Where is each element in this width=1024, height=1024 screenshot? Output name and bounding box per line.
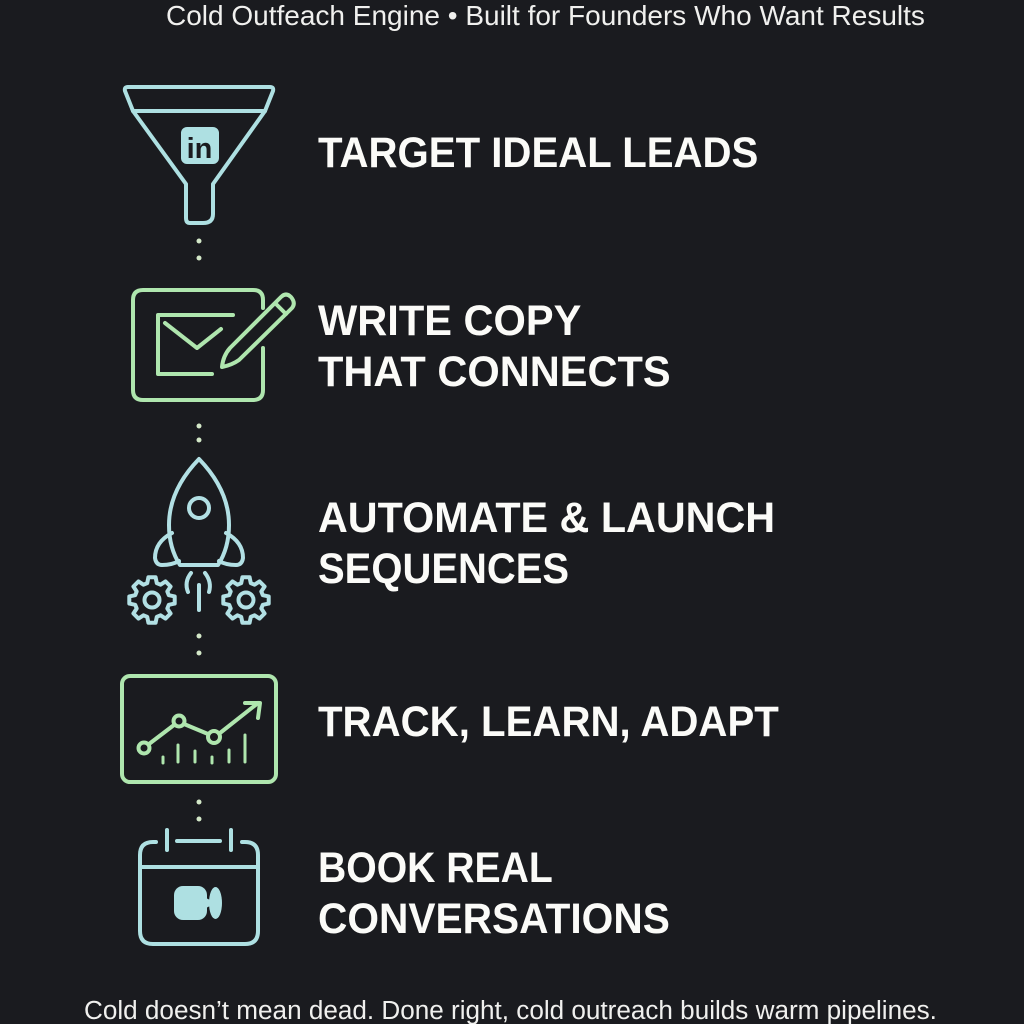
heading: write copy [318,297,670,396]
title: Cold Outfeach Engine • Built for Founders Who Want Results [166,0,925,31]
connector dots 2 [196,424,202,442]
gear left [129,577,175,623]
heading: write copy: THAT CONNECTS [318,348,670,396]
icon: calendar with video [140,830,258,944]
heading: write copy: WRITE COPY [318,297,581,345]
heading: book real conversations [318,844,669,943]
icon: funnel with linkedin [125,87,273,223]
heading: automate and launch: SEQUENCES [318,545,569,593]
icon: growth chart [122,676,276,782]
icon: rocket and gears [129,459,269,623]
heading: track learn adapt: TRACK, LEARN, ADAPT [318,698,778,746]
icon: funnel with linkedin: in [187,133,212,165]
icon: email and pencil [133,290,294,400]
heading: book real conversations: BOOK REAL [318,844,552,892]
connector dots 4 [196,800,202,822]
connector dots 3 [196,634,202,656]
heading: automate and launch: AUTOMATE & LAUNCH [318,494,775,542]
connector dots 1 [196,238,202,260]
gear right [223,577,269,623]
heading: book real conversations: CONVERSATIONS [318,895,669,943]
heading: target ideal leads: TARGET IDEAL LEADS [318,129,758,177]
heading: automate and launch [318,494,775,593]
